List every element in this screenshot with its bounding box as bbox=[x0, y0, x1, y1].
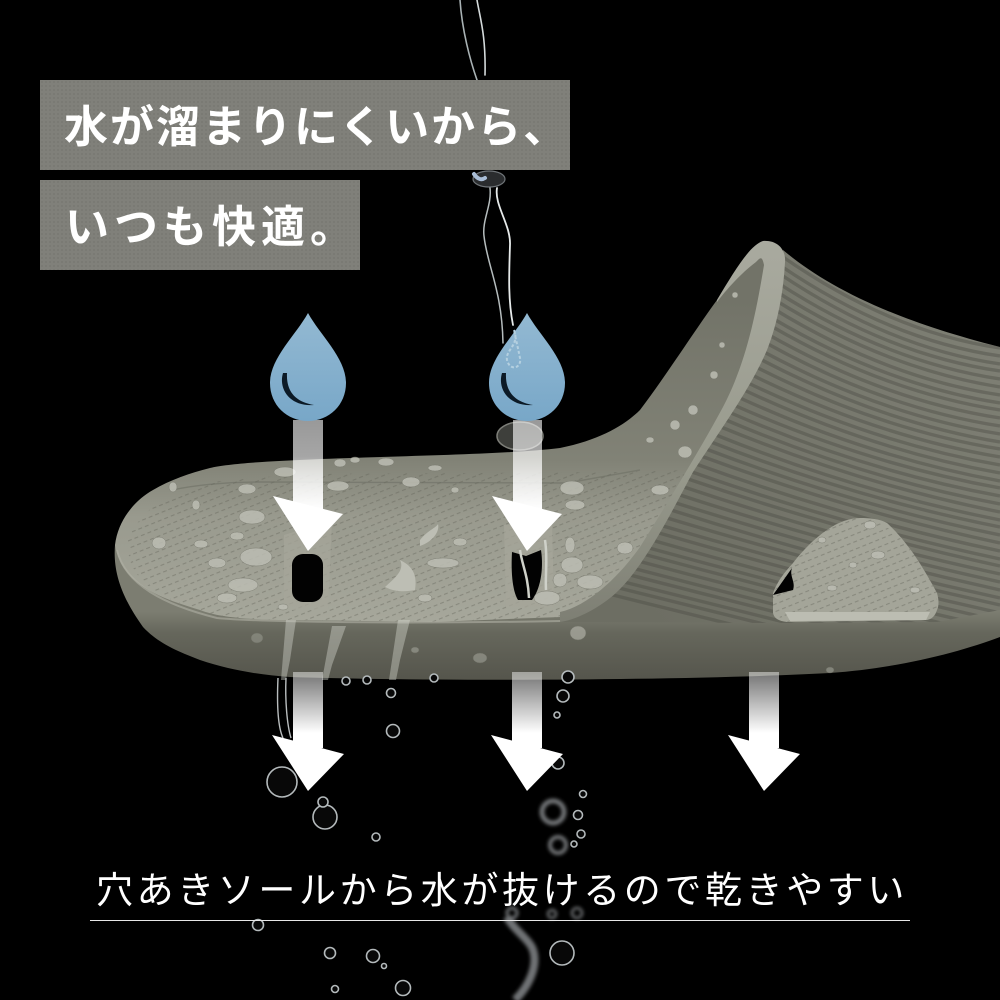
drips on sole edge bbox=[281, 620, 410, 680]
water in middle hole bbox=[520, 540, 546, 598]
ribbed upper bbox=[560, 250, 1000, 623]
opening texture bbox=[773, 518, 937, 622]
water stream bbox=[460, 0, 543, 450]
opening lip bbox=[785, 612, 930, 621]
water splash on footbed bbox=[385, 524, 438, 591]
slipper footbed and inner heel bbox=[115, 246, 775, 622]
water beads bbox=[152, 292, 920, 673]
drain hole middle bbox=[512, 550, 542, 600]
side opening bbox=[773, 518, 938, 622]
icon: water drop left bbox=[270, 313, 346, 421]
arrow: upper middle bbox=[492, 420, 562, 551]
heading band 1 bbox=[40, 80, 570, 170]
footbed texture bbox=[128, 470, 690, 622]
footbed ridge bbox=[172, 470, 640, 490]
toe edge lip bbox=[117, 550, 560, 622]
heading band 2: いつも快適。 bbox=[65, 203, 359, 252]
arrow: upper left bbox=[273, 420, 343, 551]
drain hole left bbox=[292, 554, 323, 602]
caption: 穴あきソールから水が抜けるので乾きやすい bbox=[96, 870, 908, 911]
hole grooves bbox=[284, 520, 554, 610]
falling water droplets bbox=[252, 671, 586, 996]
ribs bbox=[612, 256, 1000, 623]
slipper side wall bbox=[115, 540, 1000, 680]
rim of slipper upper bbox=[560, 241, 785, 622]
icon: water drop middle bbox=[489, 313, 565, 421]
arrow: lower middle bbox=[491, 672, 563, 791]
heading band 2 bbox=[40, 180, 360, 270]
opening hole bbox=[773, 568, 794, 595]
water streaks by lower left arrow bbox=[278, 678, 291, 738]
heading band 1: 水が溜まりにくいから、 bbox=[64, 103, 569, 152]
slipper bbox=[115, 241, 1000, 691]
arrow: lower right bbox=[728, 672, 800, 791]
arrow: lower left bbox=[272, 672, 344, 791]
water splash below caption bbox=[507, 801, 582, 1000]
